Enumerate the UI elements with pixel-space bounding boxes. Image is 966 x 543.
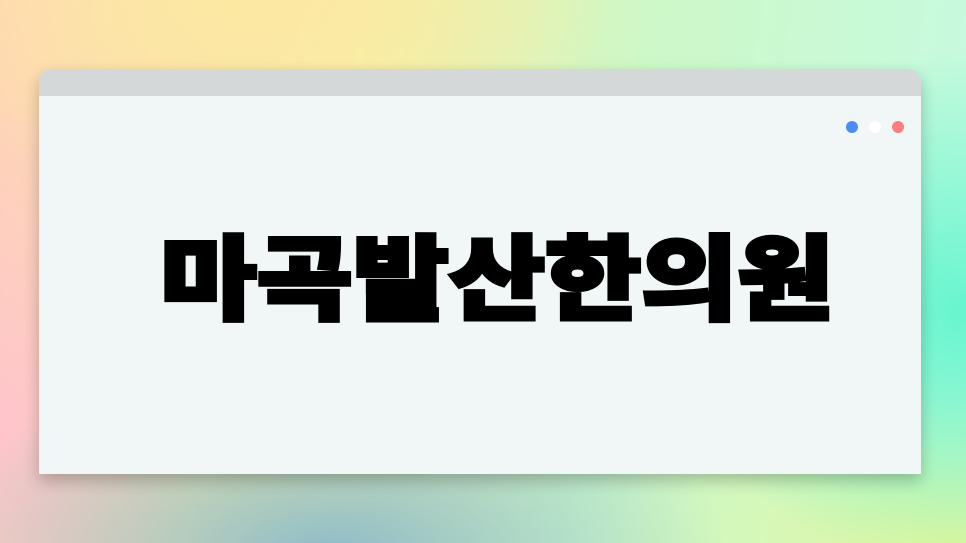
icon: blue window dot [846, 121, 858, 133]
icon: white window dot [869, 121, 881, 133]
title: 마곡발산한의원 [160, 206, 833, 339]
panel: browser window [39, 69, 921, 474]
window title bar [39, 69, 921, 96]
icon: red window dot [892, 121, 904, 133]
